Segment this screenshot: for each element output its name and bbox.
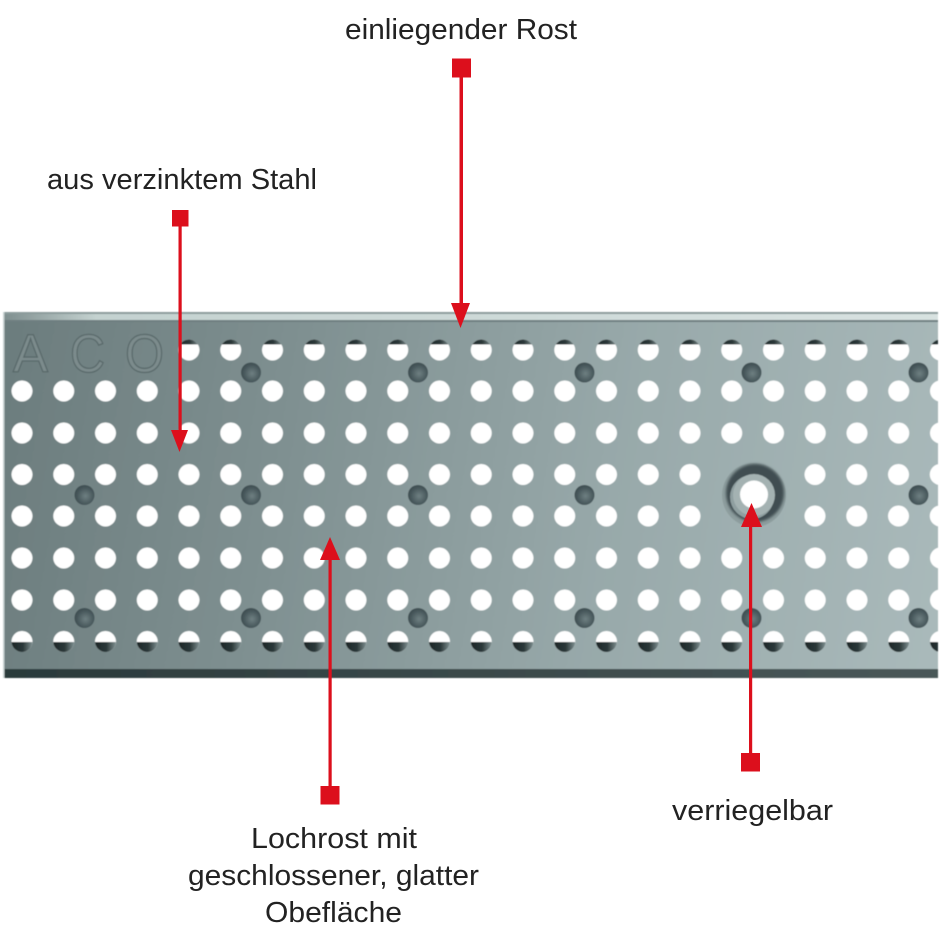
- label: verriegelbar: verriegelbar: [672, 795, 833, 827]
- arrow: Lochrost: [320, 537, 340, 804]
- bottom row half-hidden holes: [22, 631, 940, 652]
- arrow: einliegender Rost: [451, 58, 471, 328]
- top lip of grating: [3, 312, 938, 322]
- perforation holes: [22, 350, 940, 642]
- left edge of grating: [3, 312, 4, 678]
- perforated steel grating: [3, 312, 940, 678]
- top row half-hidden holes: [189, 340, 940, 360]
- bottom edge of grating: [3, 669, 938, 678]
- embossed logo ACO: [13, 324, 164, 384]
- label: Lochrost mit geschlossener, glatter Obefläche: geschlossener, glatter: [188, 860, 479, 892]
- rivets: [74, 362, 928, 628]
- label: Lochrost mit geschlossener, glatter Obefläche: Obefläche: [265, 897, 402, 929]
- embossed logo ACO: A: [13, 324, 48, 384]
- embossed logo ACO: O: [125, 324, 164, 384]
- locking bolt hole: [722, 463, 786, 527]
- label: Lochrost mit geschlossener, glatter Obefläche: Lochrost mit: [251, 823, 417, 855]
- label: Lochrost mit geschlossener, glatter Obefläche: [188, 823, 479, 929]
- arrow: verriegelbar: [741, 503, 762, 772]
- arrow: aus verzinktem Stahl: [171, 210, 188, 452]
- label: aus verzinktem Stahl: aus verzinktem Stahl: [47, 164, 317, 196]
- label: einliegender Rost: einliegender Rost: [345, 14, 577, 46]
- embossed logo ACO: C: [70, 324, 105, 384]
